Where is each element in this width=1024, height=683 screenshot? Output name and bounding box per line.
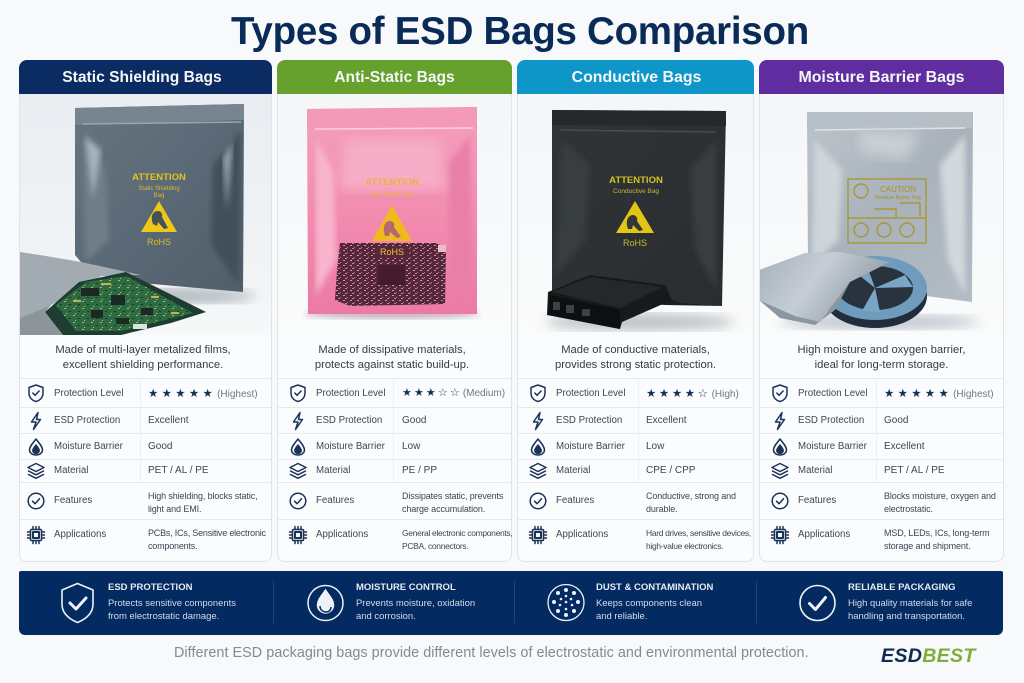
description (315, 344, 469, 371)
description: provides strong static protection. (555, 359, 716, 371)
row: moisture barrier (760, 433, 1003, 460)
row: esd protection (518, 407, 753, 434)
rating: three stars, medium: ★★★☆☆(Medium) (402, 386, 505, 399)
description: ideal for long-term storage. (815, 359, 948, 371)
row: moisture barrier (20, 433, 271, 460)
row: moisture barrier (518, 433, 753, 460)
row: features: durable. (646, 504, 678, 514)
row: material: CPE / CPP (646, 465, 695, 476)
rating: five stars, highest: ★★★★★(Highest) (884, 386, 994, 400)
icon: bolt (30, 412, 42, 430)
row: moisture barrier: Moisture Barrier (54, 441, 123, 452)
row: applications: Applications (316, 529, 368, 540)
benefit: reliable packaging (757, 571, 1003, 635)
row: esd protection: ESD Protection (54, 415, 120, 426)
photo: black conductive bag with hard drive (543, 110, 736, 332)
row: applications (760, 519, 1003, 563)
icon: check circle (529, 492, 547, 510)
icon: check circle (27, 492, 45, 510)
icon: check circle (289, 492, 307, 510)
row: esd protection (20, 407, 271, 434)
panel: conductive bags (517, 60, 754, 562)
photo: pink anti-static bag with circuit board: ATTENTION (365, 177, 419, 188)
icon: layers (289, 462, 307, 479)
row: esd protection (760, 407, 1003, 434)
row: features: light and EMI. (148, 504, 201, 514)
row: material: Material (798, 465, 832, 476)
icon: check circle (799, 584, 836, 622)
icon: dust particles (547, 583, 585, 622)
row: features: Features (54, 495, 92, 506)
row: protection level: Protection Level (556, 388, 625, 399)
photo: silver moisture barrier bag with component reel: Moisture Barrier Bag (875, 195, 921, 201)
icon: chip (770, 526, 790, 544)
icon: moisture drop (290, 438, 306, 456)
row: applications: high-value electronics. (646, 540, 723, 550)
benefit: moisture control: and corrosion. (356, 611, 416, 622)
icon: water drop (307, 584, 344, 622)
heading: moisture barrier bags: Moisture Barrier Bags (798, 69, 965, 86)
benefit: moisture control (307, 582, 475, 622)
row: material: Material (316, 465, 350, 476)
row: features (760, 482, 1003, 520)
row: moisture barrier: Moisture Barrier (316, 441, 385, 452)
heading: static shielding bags: Static Shielding Bags (62, 69, 222, 86)
icon: chip (26, 526, 46, 544)
row: moisture barrier: Low (402, 441, 420, 452)
benefit: reliable packaging: RELIABLE PACKAGING (848, 582, 956, 593)
rating: four stars, high: ★★★★☆(High) (646, 386, 739, 400)
photo: static shielding bag with circuit board: RoHS (147, 237, 171, 247)
row: applications: storage and shipment. (884, 540, 971, 550)
benefit: esd protection: from electrostatic damage. (108, 611, 219, 622)
row: applications (518, 519, 753, 563)
icon: chip (288, 526, 308, 544)
icon: bolt (292, 412, 304, 430)
footer note: Different ESD packaging bags provide different levels of electrostatic and environmental protection. (174, 645, 809, 661)
icon: layers (529, 462, 547, 479)
row: features: charge accumulation. (402, 504, 485, 514)
benefit: dust and contamination (515, 571, 756, 635)
icon: bolt (774, 412, 786, 430)
row: material: Material (556, 465, 590, 476)
row: features: Features (316, 495, 354, 506)
row: esd protection: Excellent (148, 415, 189, 426)
row: material (518, 459, 753, 483)
row: features (518, 482, 753, 520)
row: material: PE / PP (402, 465, 437, 476)
photo: static shielding bag with circuit board: Static Shielding (138, 186, 180, 192)
photo: static shielding bag with circuit board (20, 94, 271, 335)
heading: conductive bags: Conductive Bags (572, 69, 701, 86)
row: moisture barrier: Excellent (884, 441, 925, 452)
description: High moisture and oxygen barrier, (798, 344, 965, 356)
title: Types of ESD Bags Comparison (231, 10, 809, 53)
icon: moisture drop (530, 438, 546, 456)
icon: layers (27, 462, 45, 479)
row: features: Blocks moisture, oxygen and (884, 491, 996, 501)
row: esd protection (278, 407, 511, 434)
benefit: esd protection: ESD PROTECTION (108, 582, 192, 593)
row: features: Features (556, 495, 594, 506)
heading: anti-static bags: Anti-Static Bags (334, 69, 455, 86)
benefit: moisture control: MOISTURE CONTROL (356, 582, 456, 593)
benefit: dust and contamination: Keeps components clean (596, 598, 702, 609)
row: moisture barrier: Moisture Barrier (798, 441, 867, 452)
row: features: electrostatic. (884, 504, 933, 514)
row: esd protection: Excellent (646, 415, 687, 426)
icon: check circle (771, 492, 789, 510)
panel: benefits band (19, 571, 1003, 635)
row: esd protection: ESD Protection (556, 415, 622, 426)
benefit: reliable packaging: High quality materials for safe (848, 598, 972, 609)
row: applications: Applications (798, 529, 850, 540)
icon: bolt (532, 412, 544, 430)
row: esd protection: ESD Protection (316, 415, 382, 426)
row: protection level (20, 378, 271, 408)
row: applications: General electronic components, (402, 528, 512, 538)
row: applications: MSD, LEDs, ICs, long-term (884, 528, 990, 538)
row: protection level (760, 378, 1003, 408)
photo: pink anti-static bag with circuit board: Anti-Static Bag (370, 191, 414, 198)
row: material: Material (54, 465, 88, 476)
row: moisture barrier: Low (646, 441, 664, 452)
icon: moisture drop (28, 438, 44, 456)
row: applications (20, 519, 271, 563)
row: features (278, 482, 511, 520)
benefit: dust and contamination: DUST & CONTAMINATION (596, 582, 713, 593)
photo: static shielding bag with circuit board: Bag (154, 193, 164, 199)
panel: anti-static bags (277, 60, 512, 562)
photo: silver moisture barrier bag with component reel: CAUTION (880, 185, 916, 194)
heading: conductive bags (517, 60, 754, 94)
photo: silver moisture barrier bag with component reel (760, 112, 980, 330)
rating: five stars, highest: ★★★★★(Highest) (148, 386, 258, 400)
description: Made of dissipative materials, (318, 344, 466, 356)
row: esd protection: Good (884, 415, 908, 426)
icon: shield (772, 384, 788, 402)
row: features: Features (798, 495, 836, 506)
row: features (20, 482, 271, 520)
icon: moisture drop (772, 438, 788, 456)
icon: chip (528, 526, 548, 544)
row: applications: Applications (54, 529, 106, 540)
benefit: reliable packaging: handling and transportation. (848, 611, 965, 622)
photo: black conductive bag with hard drive: RoHS (623, 238, 647, 248)
heading: static shielding bags (19, 60, 272, 94)
row: protection level (518, 378, 753, 408)
photo: black conductive bag with hard drive: Conductive Bag (613, 188, 659, 195)
row: protection level: Protection Level (798, 388, 867, 399)
panel: moisture barrier bags (759, 60, 1004, 562)
description (798, 344, 965, 371)
row: features: Conductive, strong and (646, 491, 736, 501)
row: material (278, 459, 511, 483)
row: applications: Hard drives, sensitive devices, (646, 528, 751, 538)
row: applications: components. (148, 540, 197, 550)
icon: shield (28, 384, 44, 402)
benefit: esd protection (61, 582, 236, 624)
heading: anti-static bags (277, 60, 512, 94)
row: material (20, 459, 271, 483)
row: material: PET / AL / PE (148, 465, 209, 476)
row: features: High shielding, blocks static, (148, 491, 257, 501)
icon: shield (290, 384, 306, 402)
row: esd protection: ESD Protection (798, 415, 864, 426)
row: protection level: Protection Level (54, 388, 123, 399)
row: moisture barrier: Good (148, 441, 172, 452)
row: applications (278, 519, 511, 563)
benefit: dust and contamination: and reliable. (596, 611, 647, 622)
benefit: esd protection: Protects sensitive components (108, 598, 236, 609)
row: material: PET / AL / PE (884, 465, 945, 476)
row: material (760, 459, 1003, 483)
logo: ESDBEST: ESDBEST (881, 645, 976, 667)
photo: pink anti-static bag with circuit board: RoHS (380, 247, 404, 257)
icon: shield check (61, 582, 94, 624)
row: protection level: Protection Level (316, 388, 385, 399)
description: protects against static build-up. (315, 359, 469, 371)
panel: static shielding bags (19, 60, 272, 562)
row: moisture barrier: Moisture Barrier (556, 441, 625, 452)
description: Made of multi-layer metalized films, (55, 344, 231, 356)
photo: pink anti-static bag with circuit board (303, 107, 481, 320)
icon: layers (771, 462, 789, 479)
icon: shield (530, 384, 546, 402)
photo: static shielding bag with circuit board: ATTENTION (132, 172, 186, 183)
description (555, 344, 716, 371)
heading: moisture barrier bags (759, 60, 1004, 94)
description: excellent shielding performance. (63, 359, 223, 371)
benefit: moisture control: Prevents moisture, oxidation (356, 598, 475, 609)
row: features: Dissipates static, prevents (402, 491, 503, 501)
row: applications: PCBA, connectors. (402, 540, 468, 550)
photo: black conductive bag with hard drive: ATTENTION (609, 175, 663, 186)
description (55, 344, 231, 371)
row: applications: Applications (556, 529, 608, 540)
row: protection level (278, 378, 511, 408)
description: Made of conductive materials, (561, 344, 710, 356)
row: esd protection: Good (402, 415, 426, 426)
row: applications: PCBs, ICs, Sensitive electronic (148, 528, 266, 538)
row: moisture barrier (278, 433, 511, 460)
